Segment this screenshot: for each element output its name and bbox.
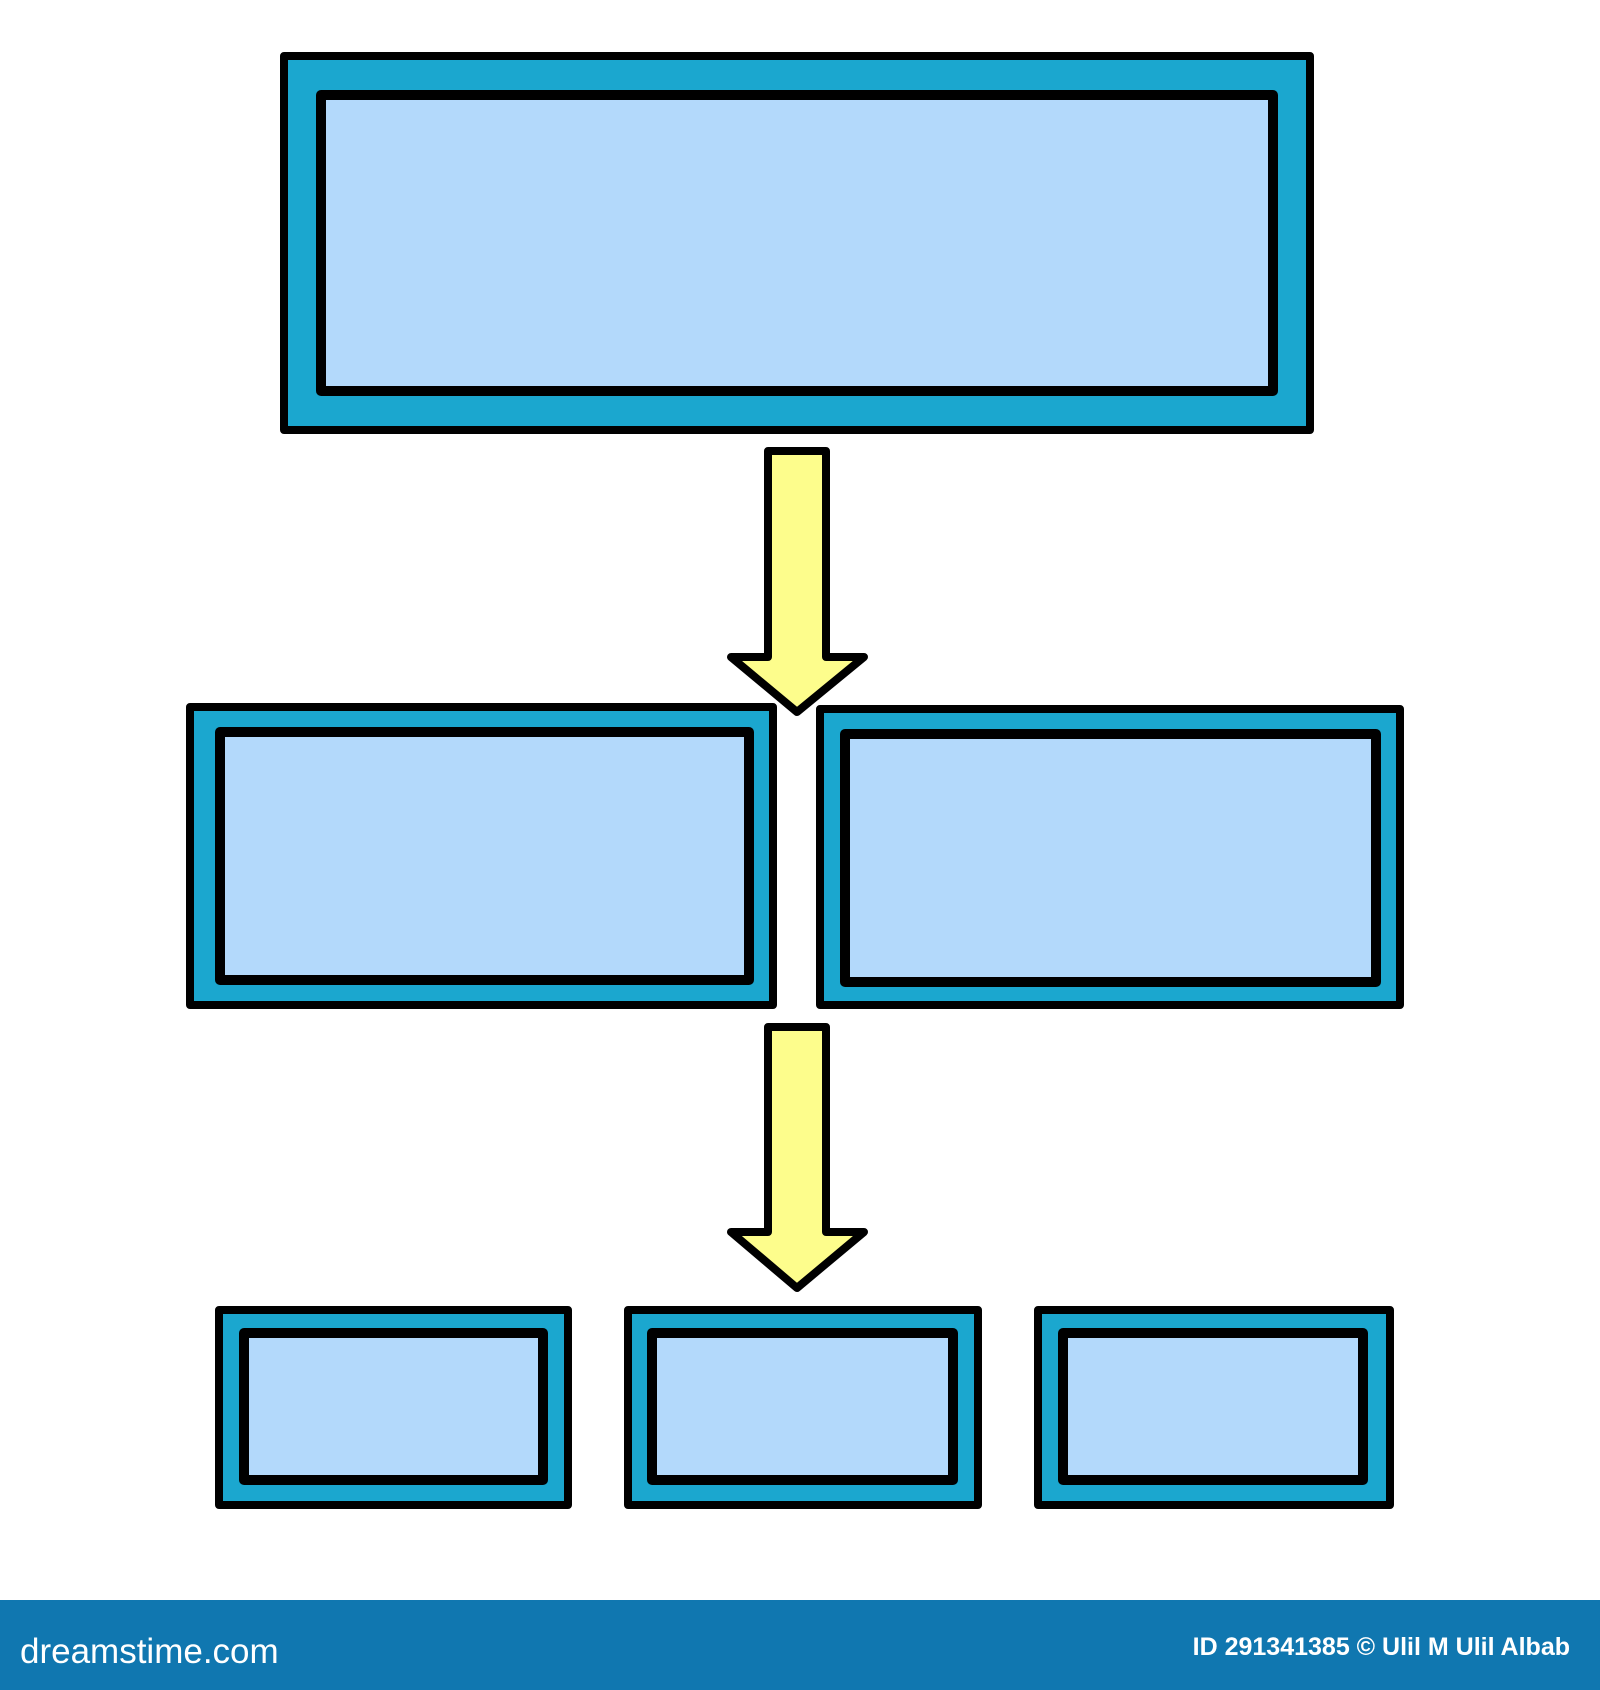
panel: top box [284, 56, 1310, 430]
arrow: top to middle [731, 451, 864, 712]
panel: bottom middle box [628, 1310, 978, 1505]
panel: bottom right box [1038, 1310, 1390, 1505]
footer credit text: ID 291341385 © Ulil M Ulil Albab [1193, 1633, 1570, 1661]
arrow: middle to bottom [731, 1027, 864, 1288]
footer bar [0, 1600, 1600, 1690]
panel: middle left box [190, 707, 773, 1005]
panel: bottom left box [219, 1310, 568, 1505]
panel: middle right box [820, 709, 1400, 1005]
footer logo text: dreamstime.com [20, 1632, 279, 1671]
